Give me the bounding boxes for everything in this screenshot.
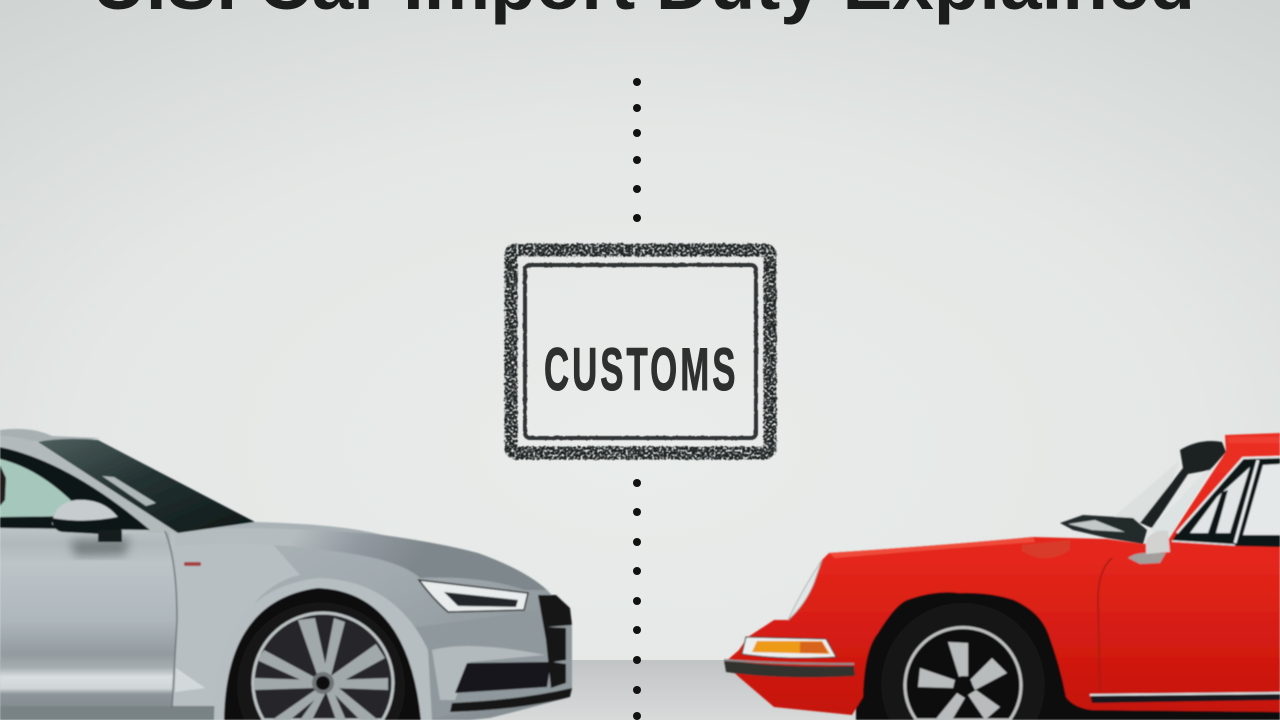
silver car: [0, 425, 580, 720]
red car underside shadow: [856, 590, 1280, 720]
silver car wheel arch: [224, 588, 421, 720]
tire: [237, 602, 405, 720]
silver car door: [0, 525, 177, 715]
red car cowl and wipers: [1060, 515, 1147, 544]
silver car grille: [538, 595, 572, 688]
silver car door seam: [165, 531, 177, 708]
silver car fender: [170, 530, 300, 720]
floor: [0, 660, 1280, 720]
spokes: [254, 618, 388, 720]
silver car sill: [0, 706, 220, 720]
silver car roof: [0, 429, 100, 445]
silver car hood shading: [175, 528, 547, 590]
red car bumper: [724, 660, 855, 677]
silver car intake: [455, 662, 551, 693]
red car headlight chrome: [788, 560, 822, 620]
silver car windshield: [38, 439, 255, 533]
silver car side marker: [184, 562, 201, 566]
rim: [253, 613, 393, 720]
red car windshield glass: [1150, 450, 1223, 540]
red car roof highlight: [1228, 437, 1280, 443]
stamp outer frame: [511, 250, 770, 453]
spokes: [918, 642, 1007, 720]
red car turn signal: [742, 637, 836, 658]
stamp text: CUSTOMS: [544, 337, 738, 403]
silver car wheel: [237, 602, 405, 720]
red car: [724, 433, 1280, 720]
silver car mirror shadow: [70, 538, 130, 556]
red car hood highlight: [829, 537, 1035, 558]
silver car headlight: [419, 580, 528, 612]
red car door seam: [1098, 558, 1112, 690]
silver car mirror: [52, 500, 122, 542]
silver car fender highlight: [175, 668, 205, 692]
red car mirror: [1128, 530, 1170, 564]
silver car body: [0, 425, 580, 720]
silver car wheel arch ring: [214, 578, 432, 720]
silver car front bumper: [510, 669, 572, 698]
dotted border line top: [633, 78, 641, 222]
dotted border line bottom: [633, 479, 641, 720]
red car body: [724, 433, 1280, 715]
red car wheel: [881, 603, 1045, 720]
tire: [881, 603, 1045, 720]
red car windows: [1172, 457, 1280, 547]
silver car side window: [0, 447, 150, 530]
red car fender crease: [1022, 540, 1070, 558]
stamp inner frame: [525, 265, 756, 438]
customs stamp: [511, 250, 770, 453]
silver car A-pillar: [0, 436, 178, 533]
red car windshield band: [1140, 441, 1226, 528]
rim: [905, 627, 1021, 720]
red car sill trim: [1090, 692, 1280, 703]
